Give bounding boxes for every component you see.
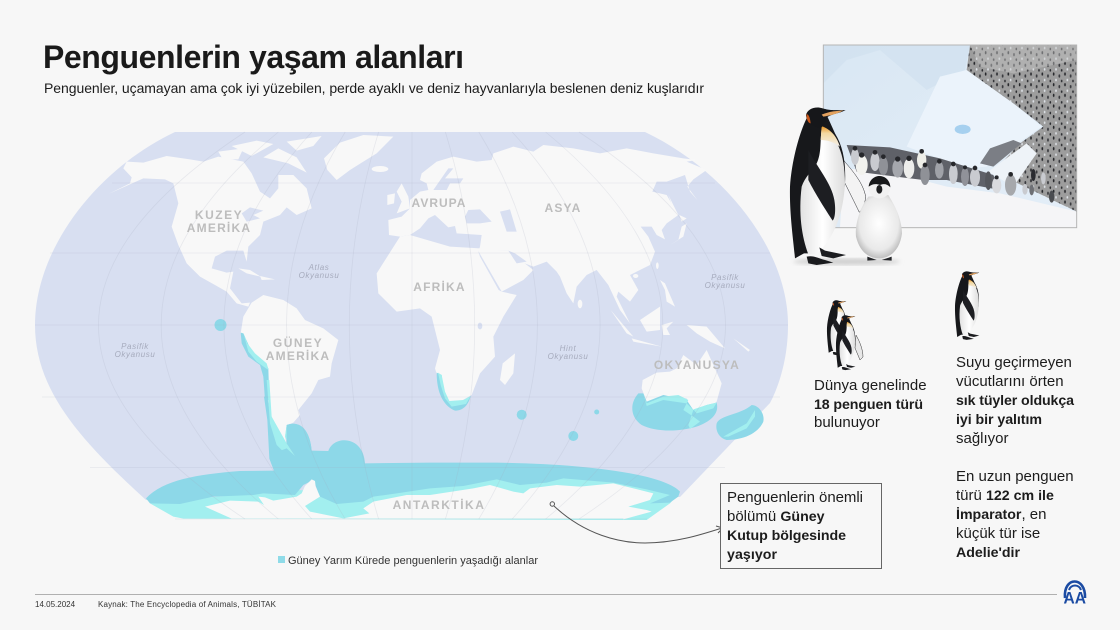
world map bbox=[35, 132, 788, 520]
land: Americas bbox=[108, 135, 393, 445]
habitat: South America coast bbox=[264, 397, 312, 471]
callout: bölümü Güney bbox=[727, 508, 825, 525]
text: number of species: 18 penguen türü bbox=[814, 397, 923, 413]
ocean bbox=[35, 132, 788, 500]
callout: Penguenlerin önemli bbox=[727, 489, 863, 506]
photo border bbox=[823, 45, 1077, 228]
continent labels: AMERİKA bbox=[187, 220, 251, 235]
habitat: Antarctic light band bbox=[150, 473, 680, 520]
continent labels: AVRUPA bbox=[412, 196, 466, 210]
text: feathers: iyi bir yalıtım bbox=[956, 412, 1042, 428]
habitat: island circles bbox=[214, 319, 599, 441]
text: number of species bbox=[814, 377, 927, 431]
continent labels: ANTARKTİKA bbox=[393, 497, 485, 512]
footer line bbox=[35, 594, 1057, 596]
habitat: Australia bbox=[632, 393, 717, 431]
habitat: Southern Africa dark bbox=[437, 373, 471, 411]
penguin habitats and Antarctica bbox=[146, 333, 764, 520]
text: feathers bbox=[956, 354, 1074, 447]
logo: AA bbox=[1064, 588, 1086, 608]
ocean labels: Okyanusu bbox=[705, 281, 745, 290]
text: feathers: sık tüyler oldukça bbox=[956, 393, 1074, 409]
text: size: küçük tür ise bbox=[956, 525, 1040, 542]
text: size bbox=[956, 468, 1074, 561]
footer source: Kaynak: The Encyclopedia of Animals, TÜBİTAK bbox=[98, 600, 277, 609]
chick bbox=[856, 176, 902, 261]
callout bbox=[720, 484, 882, 568]
habitat: New Zealand bbox=[716, 405, 764, 440]
continent labels: KUZEY bbox=[195, 208, 243, 222]
text: size: İmparator, en bbox=[956, 506, 1046, 523]
adult king penguin bbox=[790, 108, 866, 265]
text: feathers: Suyu geçirmeyen bbox=[956, 354, 1072, 371]
chick heads bbox=[853, 146, 1013, 179]
text: size: En uzun penguen bbox=[956, 468, 1074, 485]
land: Antarctica bbox=[205, 479, 653, 519]
title: Penguenlerin yaşam alanları bbox=[43, 39, 464, 75]
subtitle: Penguenler, uçamayan ama çok iyi yüzebilen, perde ayaklı ve deniz hayvanlarıyla beslenen deniz kuşlarıdır bbox=[44, 80, 704, 96]
continent labels: GÜNEY bbox=[273, 335, 323, 350]
ocean labels bbox=[115, 263, 745, 361]
text: size: türü 122 cm ile bbox=[956, 487, 1054, 504]
text: feathers: sağlıyor bbox=[956, 430, 1009, 447]
ocean labels: Okyanusu bbox=[299, 271, 339, 280]
continent labels: ASYA bbox=[544, 201, 582, 215]
map graticule bbox=[35, 132, 788, 519]
land: Eurasia, Africa, Australia bbox=[377, 145, 750, 407]
ocean labels: Hint bbox=[560, 344, 576, 353]
continent labels: OKYANUSYA bbox=[654, 358, 740, 372]
penguin shadows bbox=[793, 258, 900, 265]
icon: two penguins bbox=[827, 300, 863, 370]
text: number of species: Dünya genelinde bbox=[814, 377, 927, 394]
callout: Kutup bölgesinde bbox=[727, 528, 846, 544]
footer date: 14.05.2024 bbox=[35, 600, 76, 609]
continent labels bbox=[187, 196, 740, 512]
icon: single penguin bbox=[955, 271, 979, 340]
ocean labels: Pasifik bbox=[121, 342, 149, 351]
photo: emperor penguin colony and penguin illustration bbox=[790, 45, 1077, 265]
continent labels: AMERİKA bbox=[266, 348, 330, 363]
ocean labels: Okyanusu bbox=[115, 350, 155, 359]
ocean labels: Okyanusu bbox=[548, 352, 588, 361]
colony photo bbox=[823, 45, 1077, 228]
callout: yaşıyor bbox=[727, 547, 777, 563]
arrow: Antarctica to callout bbox=[550, 502, 723, 543]
land: Australia bbox=[642, 350, 722, 410]
ocean labels: Pasifik bbox=[711, 273, 739, 282]
habitat: Antarctic dark band bbox=[146, 424, 680, 504]
habitat: Southern Africa light bbox=[438, 373, 471, 407]
logo bbox=[1064, 582, 1086, 608]
text: feathers: vücutlarını örten bbox=[956, 373, 1064, 390]
text: size: Adelie'dir bbox=[956, 545, 1020, 561]
ocean labels: Atlas bbox=[308, 263, 329, 272]
legend: Güney Yarım Kürede penguenlerin yaşadığı alanlar bbox=[288, 555, 538, 567]
text: number of species: bulunuyor bbox=[814, 414, 880, 431]
continent labels: AFRİKA bbox=[413, 279, 466, 294]
